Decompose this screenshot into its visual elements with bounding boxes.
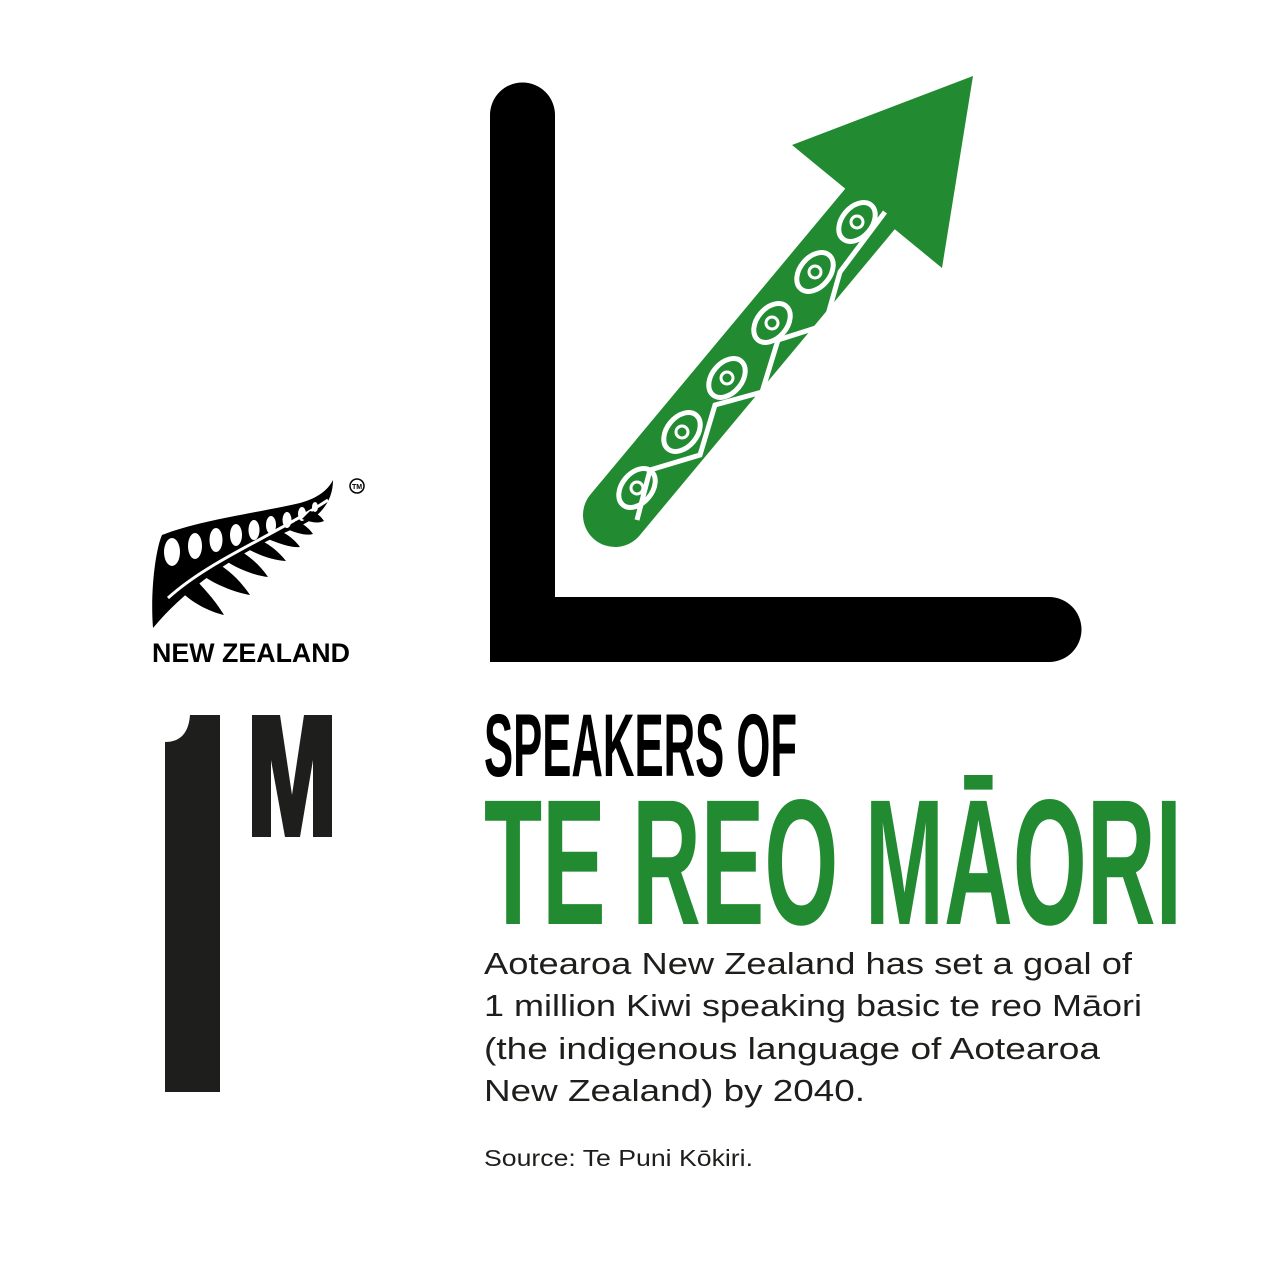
body text: (the indigenous language of Aotearoa (484, 1031, 1101, 1066)
logo: silver fern (152, 479, 364, 628)
body text: New Zealand) by 2040. (484, 1073, 865, 1108)
logo text: NEW ZEALAND (152, 638, 350, 668)
chart axes L shape (490, 82, 1082, 662)
body text (484, 946, 1142, 1108)
source: Source: Te Puni Kōkiri. (484, 1145, 753, 1171)
growth arrow (611, 76, 973, 520)
body text: Aotearoa New Zealand has set a goal of (484, 946, 1132, 981)
koru pattern on arrow (611, 196, 885, 520)
infographic: SPEAKERS OF (484, 695, 797, 795)
logo: silver fern: TM (352, 484, 362, 491)
big number 1M (165, 715, 332, 1092)
body text: 1 million Kiwi speaking basic te reo Māori (484, 988, 1142, 1023)
